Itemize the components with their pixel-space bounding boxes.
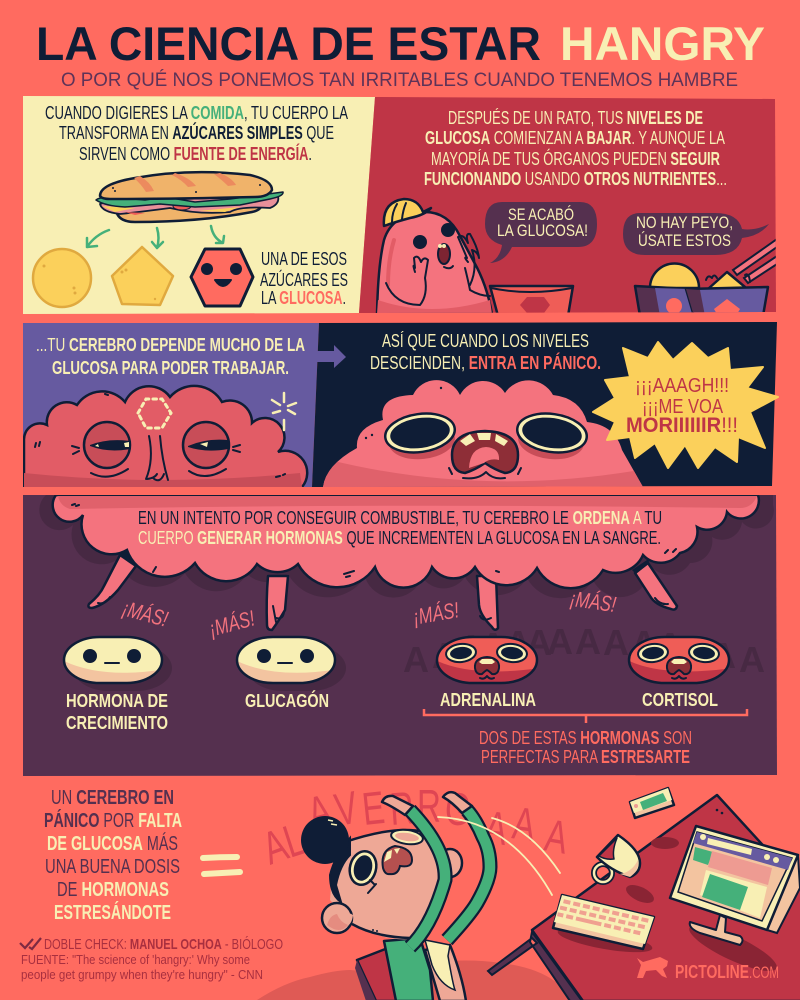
- text: conclusion: DE GLUCOSA MÁS: [47, 832, 178, 855]
- credits: people get grumpy when they're hungry" - CNN: [21, 967, 263, 982]
- shouts: más: ¡MÁS!: [569, 586, 618, 617]
- commanding brain: [53, 495, 759, 588]
- text: glucose note: AZÚCARES ES: [260, 269, 348, 290]
- panel: digestion: [23, 96, 375, 314]
- text: glucose note: [260, 249, 348, 308]
- callout: scream burst: ¡¡¡ME VOA: [642, 396, 724, 418]
- text: brain depends on glucose: ...TU CEREBRO DEPENDE MUCHO DE LA: [36, 335, 305, 355]
- text: conclusion: UNA BUENA DOSIS: [45, 856, 180, 878]
- text: glucose drops: [424, 108, 727, 189]
- text: glucose note: LA GLUCOSA.: [261, 288, 346, 308]
- text: glucose drops: DESPUÉS DE UN RATO, TUS NIVELES DE: [448, 108, 703, 128]
- hand: pointing at glucagon: [267, 576, 288, 630]
- panel: brain needs glucose: [23, 323, 319, 487]
- text: hormone order: CUERPO GENERAR HORMONAS QUE INCREMENTEN LA GLUCOSA EN LA SANGRE.: [138, 528, 661, 548]
- panel: hormones: [23, 495, 777, 776]
- text: stress hormones note: PERFECTAS PARA ESTRESARTE: [481, 747, 690, 767]
- text: brain depends on glucose: [36, 335, 305, 378]
- text: glucose drops: FUNCIONANDO USANDO OTROS NUTRIENTES...: [424, 169, 727, 189]
- illustration: desk: [488, 788, 800, 1000]
- subtitle: O POR QUÉ NOS PONEMOS TAN IRRITABLES CUANDO TENEMOS HAMBRE: [61, 68, 738, 91]
- hormone: adrenaline: [436, 636, 538, 684]
- shouts: más: [120, 586, 618, 642]
- labels: hormone names: CORTISOL: [642, 690, 718, 710]
- bracket: stress hormones: [424, 709, 747, 723]
- character: panicked brain: [315, 380, 650, 490]
- hand: pointing at cortisol: [632, 558, 677, 610]
- text: glucose note: UNA DE ESOS: [261, 249, 347, 269]
- text: stress hormones note: DOS DE ESTAS HORMONAS SON: [479, 728, 692, 748]
- logo: pictoline: .COM: [749, 963, 779, 982]
- text: brain depends on glucose: GLUCOSA PARA PODER TRABAJAR.: [52, 358, 289, 378]
- icon: hard hat: [384, 199, 431, 226]
- icon: round sugar: [33, 249, 91, 307]
- chair: [355, 948, 394, 1000]
- icon: pentagon sugar: [112, 247, 173, 305]
- speech bubble: glucose ran out: [485, 202, 597, 263]
- shout: alaverga: A: [256, 820, 294, 875]
- panel: glucose drops: [359, 97, 777, 316]
- labels: hormone names: GLUCAGÓN: [245, 690, 329, 711]
- speech bubble: use these: NO HAY PEYO,: [636, 213, 733, 232]
- text: hormone order: EN UN INTENTO POR CONSEGUIR COMBUSTIBLE, TU CEREBRO LE ORDENA A TU: [138, 508, 662, 528]
- shout: alaverga: E: [360, 783, 387, 835]
- icon: phone: [630, 788, 674, 818]
- shout: alaverga: A: [482, 802, 511, 855]
- callout: scream burst: MORIIIIIIR!!!: [626, 414, 738, 437]
- shout: alaverga: A: [541, 810, 572, 864]
- credits: DOBLE CHECK: MANUEL OCHOA - BIÓLOGO: [44, 936, 283, 953]
- text: digestion intro: SIRVEN COMO FUENTE DE ENERGÍA.: [79, 143, 312, 164]
- icon: double check: [20, 938, 41, 949]
- icon: nutrient bins: [635, 239, 777, 316]
- arms: [382, 792, 490, 947]
- shout: alaverga: A: [303, 785, 337, 840]
- hand: pointing at growth hormone: [88, 548, 137, 608]
- labels: hormone names: CRECIMIENTO: [66, 713, 168, 733]
- shout: alaverga: A: [510, 798, 539, 851]
- text: digestion intro: [45, 103, 348, 164]
- hormone: cortisol: [628, 636, 730, 684]
- text: brain panics: DESCIENDEN, ENTRA EN PÁNICO.: [370, 352, 601, 373]
- icon: sandwich: [96, 172, 283, 222]
- icon: empty glucose bin: [490, 286, 573, 316]
- shout: alaverga: L: [278, 814, 311, 868]
- shout: alaverga: R: [417, 782, 441, 832]
- text: conclusion: ESTRESÁNDOTE: [54, 901, 171, 924]
- character: worried organ: [377, 199, 492, 314]
- callout: scream burst: ¡¡¡AAAGH!!!: [635, 375, 729, 397]
- head: [301, 816, 462, 939]
- credits: FUENTE: "The science of 'hangry:' Why some: [21, 952, 250, 967]
- text: brain panics: ASÍ QUE CUANDO LOS NIVELES: [382, 331, 589, 351]
- icon: keyboard: [553, 895, 654, 949]
- shouts: más: ¡MÁS!: [206, 605, 257, 642]
- callout: scream burst: [593, 342, 778, 468]
- text: brain panics: [370, 331, 601, 373]
- logo: pictoline: [637, 957, 778, 978]
- text: conclusion: UN CEREBRO EN: [51, 787, 174, 809]
- hill: floor: [257, 960, 583, 1000]
- shout: alaverga: V: [331, 783, 362, 836]
- character: stressed person: [301, 792, 490, 1000]
- hormone: growth hormone: [60, 637, 172, 691]
- text: stress hormones note: [479, 728, 692, 767]
- shout: alaverga: R: [388, 783, 416, 835]
- speech bubble: glucose ran out: SE ACABÓ: [508, 205, 574, 224]
- speech bubble: use these: [623, 213, 769, 255]
- labels: hormone names: ADRENALINA: [440, 690, 536, 710]
- icon: sparkle: [272, 393, 296, 430]
- shout: alaverga: G: [443, 784, 473, 836]
- text: conclusion: [44, 787, 182, 924]
- arrow: to panic: [317, 345, 346, 368]
- panel: brain panics: [312, 322, 778, 490]
- background scream: AAAAAAAAAAAAAA: [403, 621, 765, 680]
- text: hormone order: [138, 508, 662, 548]
- text: digestion intro: CUANDO DIGIERES LA COMIDA, TU CUERPO LA: [45, 103, 348, 123]
- equals sign: [203, 857, 240, 874]
- motion lines: [438, 817, 560, 895]
- hormone: glucagon: [233, 637, 346, 691]
- text: glucose drops: MAYORÍA DE TUS ÓRGANOS PUEDEN SEGUIR: [431, 148, 720, 169]
- torso: [384, 938, 466, 1000]
- text: glucose drops: GLUCOSA COMIENZAN A BAJAR. Y AUNQUE LA: [425, 128, 725, 148]
- icon: monitor: [670, 826, 800, 945]
- credits: [20, 936, 283, 982]
- speech bubble: glucose ran out: LA GLUCOSA!: [497, 221, 588, 240]
- title: HANGRY: [560, 17, 765, 70]
- character: tired brain: [24, 386, 307, 487]
- hand: pointing at adrenaline: [477, 576, 498, 630]
- text: digestion intro: TRANSFORMA EN AZÚCARES SIMPLES QUE: [59, 122, 334, 143]
- shouts: más: ¡MÁS!: [120, 596, 171, 632]
- desk legs: [488, 932, 582, 1000]
- text: conclusion: PÁNICO POR FALTA: [44, 809, 182, 832]
- logo: pictoline: PICTOLINE: [675, 962, 749, 982]
- shouts: más: ¡MÁS!: [411, 597, 461, 630]
- icon: glucose hexagon: [191, 249, 253, 306]
- arrows: sandwich to sugars: [87, 226, 224, 248]
- speech bubble: use these: ÚSATE ESTOS: [638, 231, 731, 250]
- icon: mug: [594, 835, 640, 882]
- shout: alaverga: [256, 782, 572, 875]
- labels: hormone names: [66, 690, 718, 733]
- labels: hormone names: HORMONA DE: [66, 691, 168, 711]
- brain shadow: [39, 495, 774, 598]
- title: LA CIENCIA DE ESTAR: [36, 17, 541, 70]
- text: conclusion: DE HORMONAS: [57, 879, 169, 901]
